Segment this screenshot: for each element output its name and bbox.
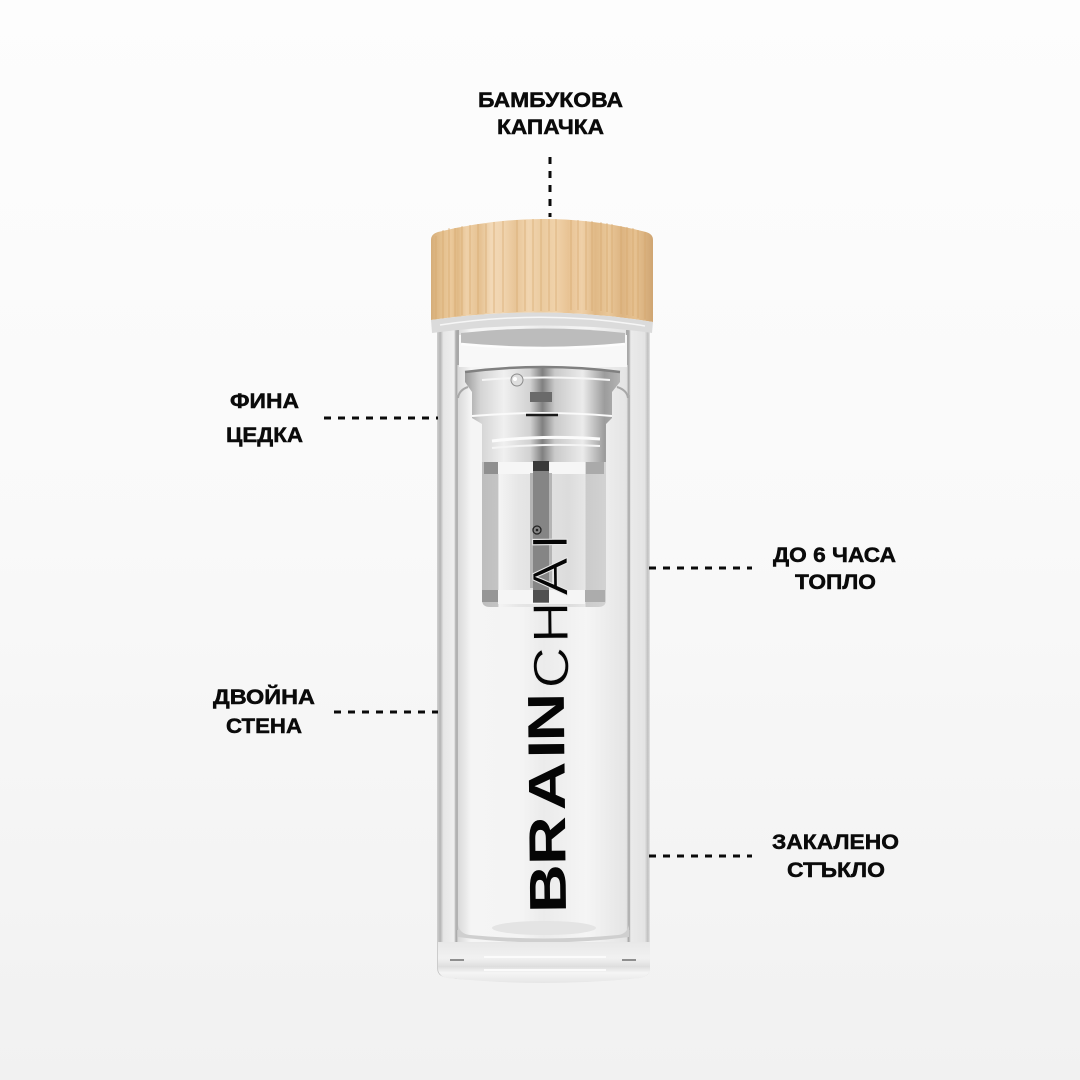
- dashed leader: [324, 416, 438, 420]
- bottle glass body: [437, 325, 650, 983]
- label: ТОПЛО: [795, 571, 876, 594]
- dashed leader: [649, 566, 752, 570]
- dashed leader: [334, 710, 438, 714]
- label: ЦЕДКА: [226, 424, 303, 447]
- label: КАПАЧКА: [497, 116, 604, 139]
- label: СТЕНА: [226, 715, 302, 738]
- strainer neck rings: [465, 367, 620, 464]
- logo word bold: BRAIN: BRAIN: [516, 692, 577, 913]
- label: [772, 831, 899, 882]
- strainer mesh cup: [482, 462, 606, 607]
- label: ДО 6 ЧАСА: [773, 544, 896, 567]
- fine strainer: [465, 367, 620, 607]
- label: [226, 390, 303, 447]
- label: [773, 544, 896, 594]
- label: ДВОЙНА: [213, 685, 315, 709]
- callout: bamboo lid: [478, 89, 623, 217]
- logo registered mark: [533, 526, 541, 534]
- upper chamber below lid: [459, 328, 627, 367]
- product: glass infuser bottle: [431, 219, 653, 983]
- callout: up to 6 hours warm: [649, 544, 896, 594]
- strainer centre rod: [530, 461, 552, 603]
- bamboo lid: [431, 219, 653, 333]
- bottle double-wall base: [438, 921, 650, 983]
- label: ЗАКАЛЕНО: [772, 831, 899, 854]
- callout: fine strainer: [226, 390, 438, 447]
- logo word light: CHAI: CHAI: [522, 534, 580, 689]
- label: [478, 89, 623, 139]
- printed logo: BRAINCHAI: [516, 526, 580, 913]
- label: ФИНА: [230, 390, 299, 413]
- label: СТЪКЛО: [787, 859, 885, 882]
- dashed leader: [649, 854, 752, 858]
- callout: double wall: [213, 685, 438, 738]
- callout: tempered glass: [649, 831, 899, 882]
- dashed leader: [548, 157, 552, 217]
- label: БАМБУКОВА: [478, 89, 623, 112]
- label: [213, 685, 315, 738]
